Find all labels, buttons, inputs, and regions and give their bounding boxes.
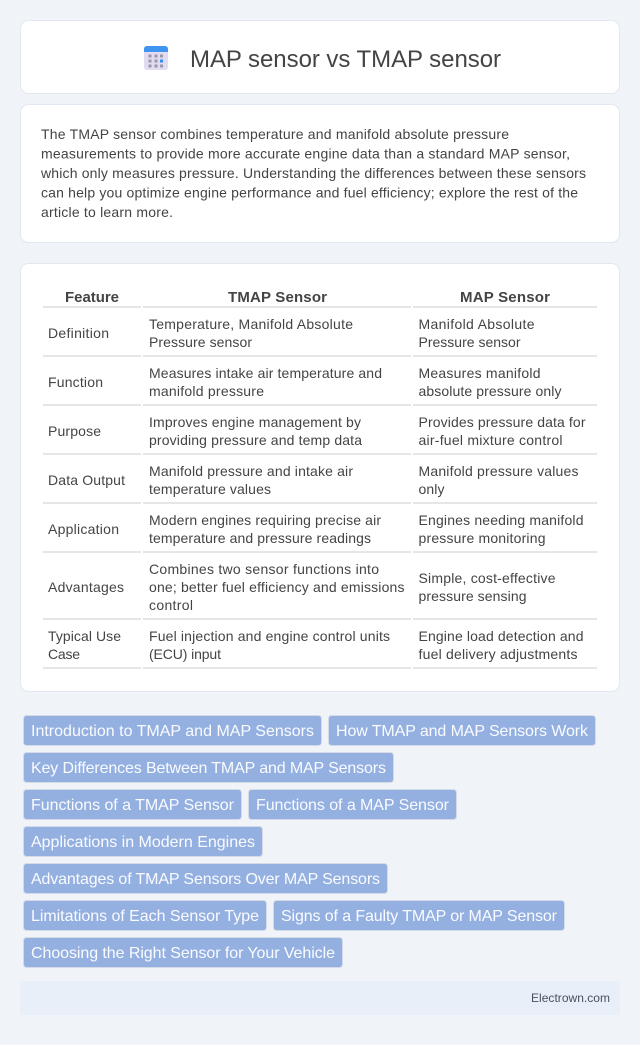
row: purpose: Purpose [48,423,101,439]
tag: introduction: Introduction to TMAP and MAP Sensors [31,723,314,740]
tag: key differences [24,752,394,782]
row: typical use case: Case [48,646,80,662]
row: typical use case: fuel delivery adjustments [418,646,578,662]
intro text block: The TMAP sensor combines temperature and manifold absolute pressure [41,126,509,142]
panel: introduction [20,104,620,242]
table header [65,289,550,306]
row: data output [48,463,578,497]
row: purpose: Improves engine management by [149,414,361,430]
intro text block: can help you optimize engine performance and fuel efficiency; explore the rest of the [41,184,578,200]
row: advantages: one; better fuel efficiency and emissions [149,579,404,595]
row: definition: Pressure sensor [418,334,521,350]
table header: TMAP Sensor [228,289,327,306]
icon: calendar [144,46,168,70]
row: application: Modern engines requiring precise air [149,512,381,528]
row: typical use case: Typical Use [48,628,121,644]
tag: choosing sensor: Choosing the Right Sensor for Your Vehicle [31,945,335,962]
row: typical use case: (ECU) input [149,646,221,662]
row: advantages: Simple, cost-effective [418,570,556,586]
tag: functions of MAP [248,790,456,820]
row: definition: Definition [48,325,109,341]
panel: comparison table [20,264,620,692]
row: definition: Temperature, Manifold Absolute [149,316,353,332]
intro text block: measurements to provide more accurate engine data than a standard MAP sensor, [41,146,570,162]
tag: advantages [24,864,388,894]
row: definition: Manifold Absolute [418,316,535,332]
row: purpose [48,414,586,448]
tag: how sensors work: How TMAP and MAP Sensors Work [336,723,589,740]
tag: faulty sensor signs [274,900,564,930]
row: definition [48,316,535,350]
row: advantages: control [149,597,193,613]
tag: limitations: Limitations of Each Sensor Type [31,908,259,925]
row: function: Measures manifold [418,365,540,381]
row: advantages [48,561,556,613]
tag: how sensors work [328,716,596,746]
tag: advantages: Advantages of TMAP Sensors Over MAP Sensors [31,871,380,888]
row: typical use case: Fuel injection and engine control units [149,628,390,644]
row: data output: Data Output [48,472,125,488]
row: data output: only [418,481,444,497]
row: data output: temperature values [149,481,271,497]
tag: faulty sensor signs: Signs of a Faulty TMAP or MAP Sensor [281,908,558,925]
row: advantages: Combines two sensor functions into [149,561,379,577]
row: purpose: Provides pressure data for [418,414,586,430]
tag: key differences: Key Differences Between TMAP and MAP Sensors [31,760,386,777]
intro text block: which only measures pressure. Understanding the differences between these sensors [40,165,586,181]
row: application: pressure monitoring [418,530,546,546]
row: application [48,512,584,546]
title: MAP sensor vs TMAP sensor [190,46,501,73]
table header: MAP Sensor [460,289,550,306]
row: data output: Manifold pressure and intake air [149,463,353,479]
tag: limitations [24,900,266,930]
panel: topic tags [24,716,596,968]
row: definition: Pressure sensor [149,334,252,350]
tag: functions of MAP: Functions of a MAP Sensor [256,797,450,814]
panel: title header [20,20,620,94]
footer: Electrown.com [531,991,610,1005]
row: function [48,365,562,399]
tag: applications [24,826,262,856]
tag: choosing sensor [24,938,342,968]
row: application: Engines needing manifold [418,512,584,528]
row: function: Measures intake air temperature and [149,365,382,381]
footer [20,981,620,1015]
row: application: temperature and pressure readings [149,530,371,546]
tag: functions of TMAP: Functions of a TMAP Sensor [31,797,235,814]
row: function: manifold pressure [149,383,264,399]
intro text block [40,126,586,220]
table header: Feature [65,289,119,306]
row: typical use case: Engine load detection and [418,628,584,644]
tag: introduction [24,716,322,746]
row: application: Application [48,521,119,537]
tag: functions of TMAP [24,790,242,820]
tag: applications: Applications in Modern Engines [31,834,255,851]
row: advantages: Advantages [48,579,124,595]
row: function: absolute pressure only [418,383,562,399]
row: purpose: air-fuel mixture control [418,432,562,448]
intro text block: article to learn more. [41,204,173,220]
row: purpose: providing pressure and temp data [149,432,362,448]
row: advantages: pressure sensing [418,588,526,604]
row: typical use case [48,628,584,662]
row: function: Function [48,374,103,390]
row: data output: Manifold pressure values [418,463,578,479]
